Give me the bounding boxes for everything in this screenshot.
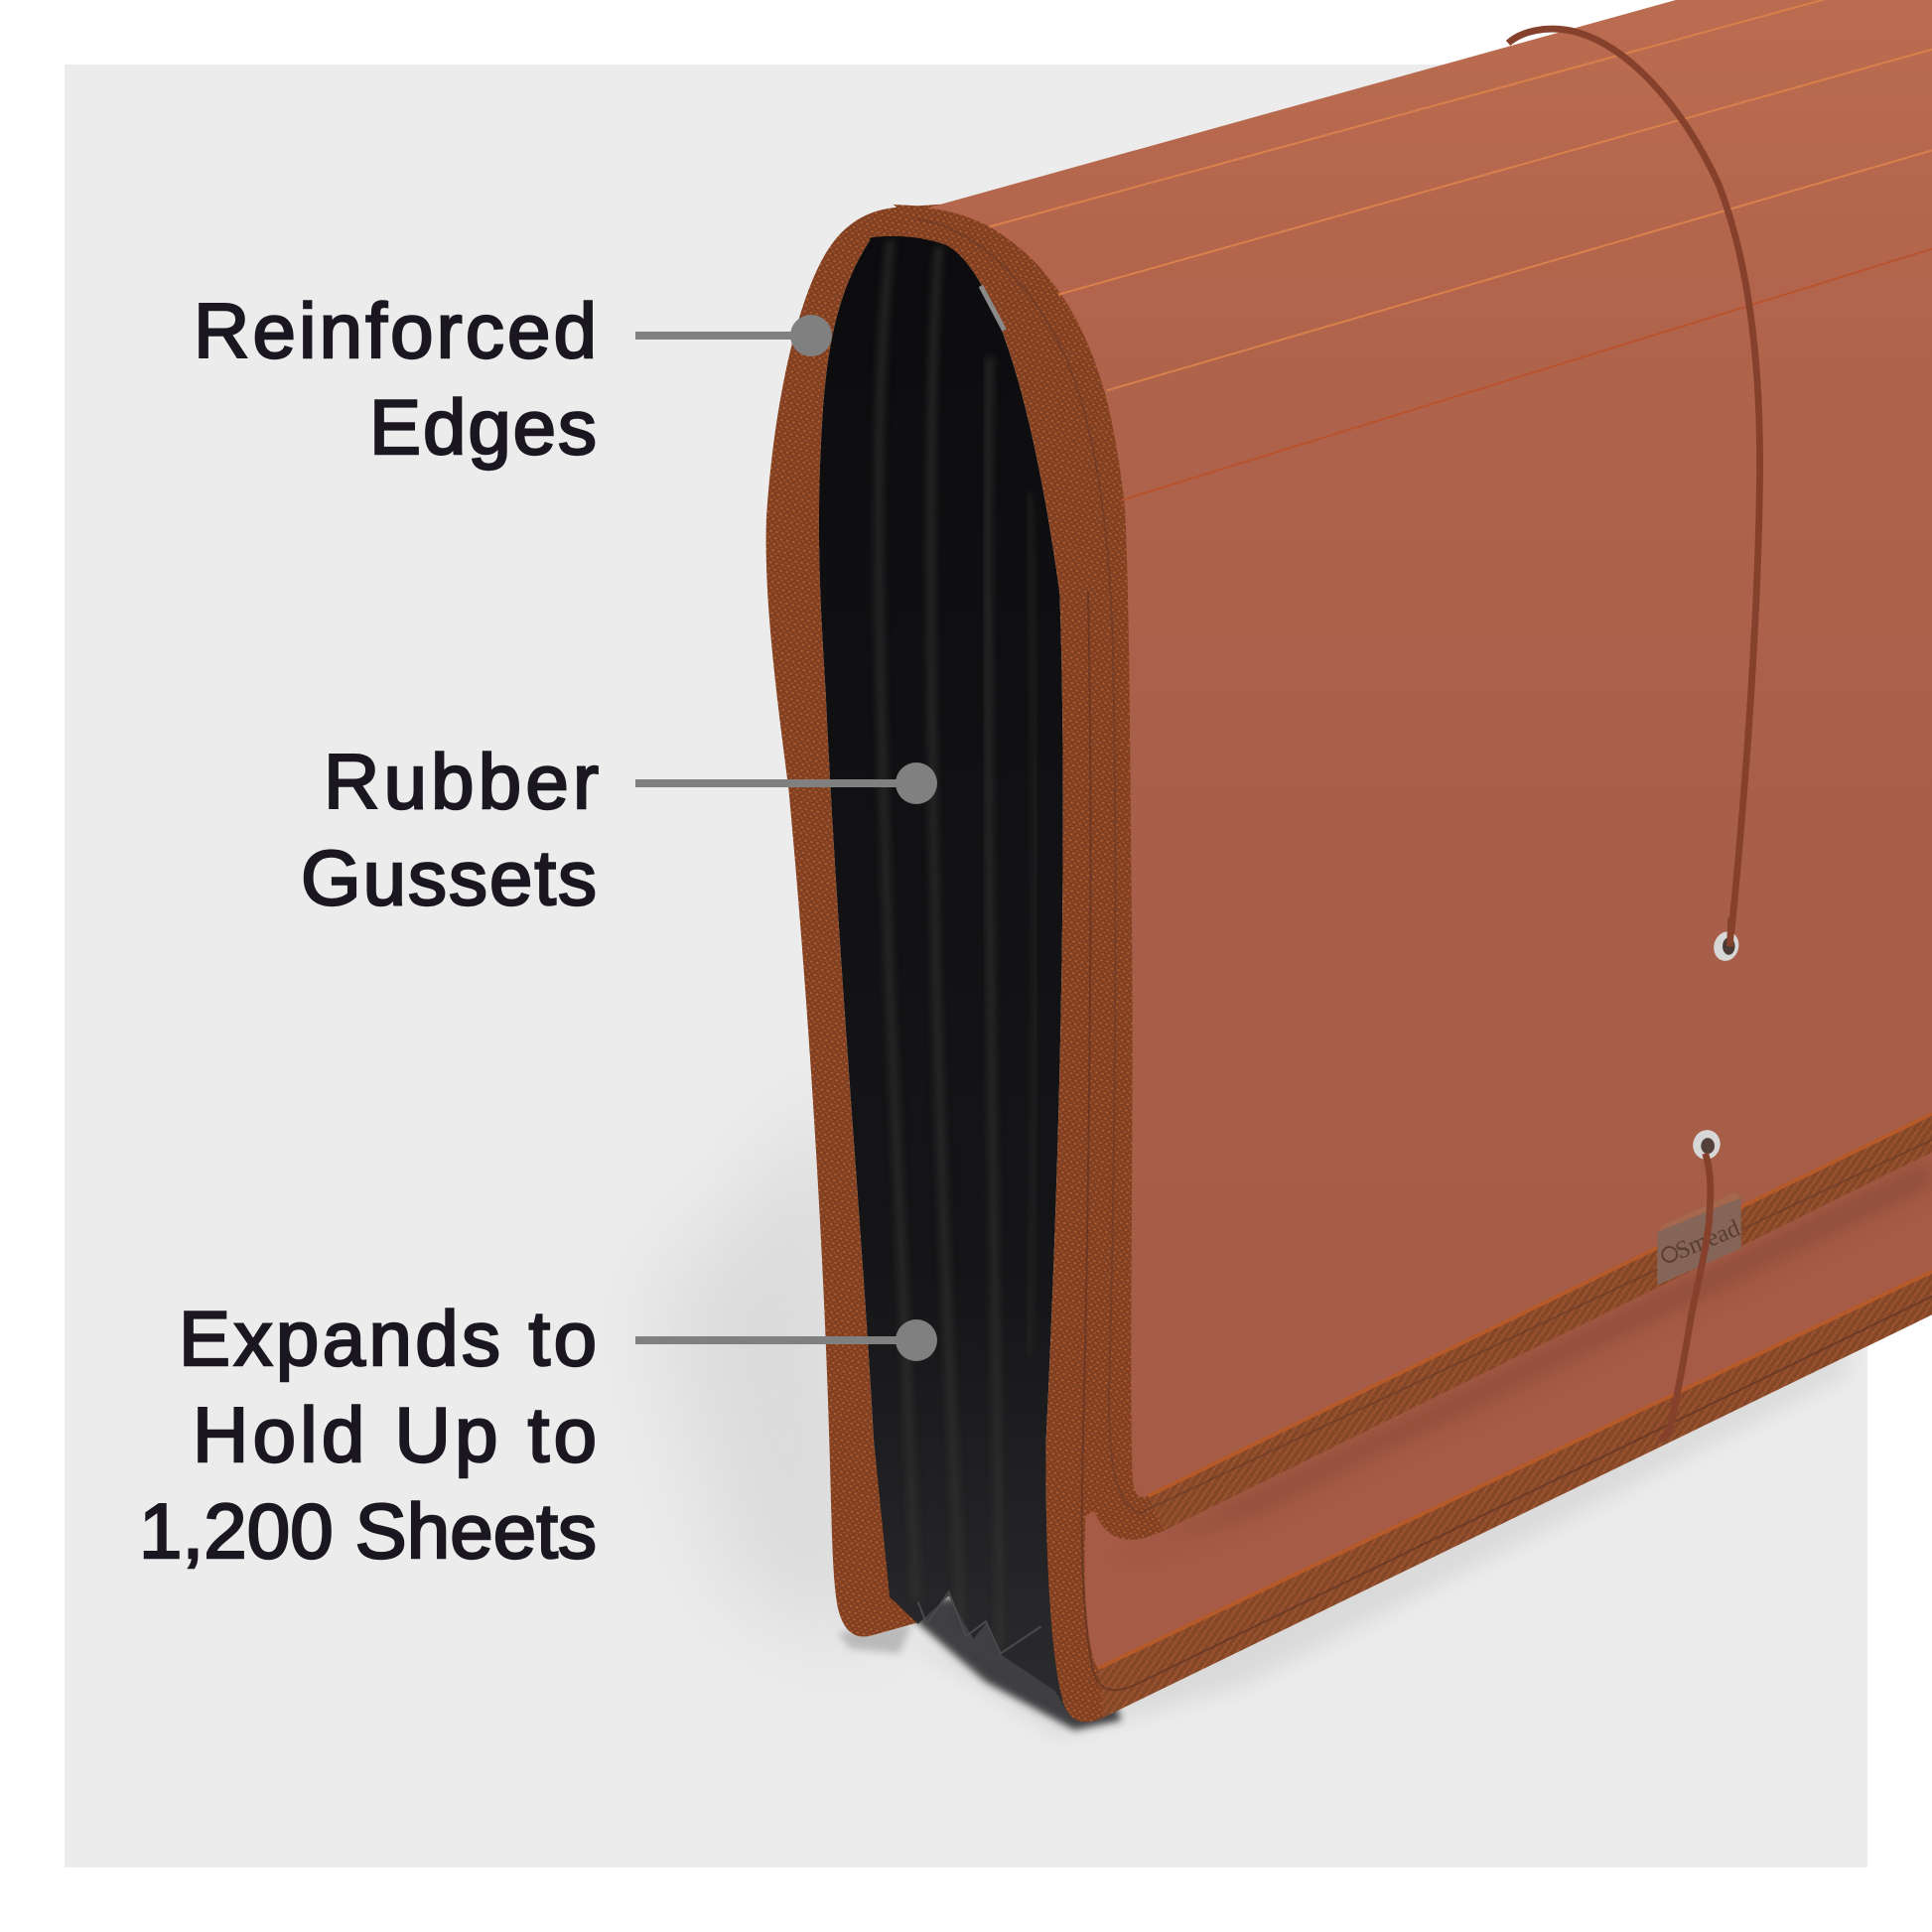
text: capacity label: Expands to	[179, 1295, 597, 1382]
callout: capacity	[139, 1295, 937, 1575]
top fold lines	[990, 0, 1932, 500]
leader line	[635, 779, 908, 787]
gusset pleats	[879, 240, 1041, 1654]
rubber gussets interior	[819, 236, 1069, 1716]
staple on inner edge	[981, 286, 1004, 331]
text: reinforced edges label: Edges	[369, 383, 597, 471]
callout: reinforced edges	[194, 287, 832, 471]
text: rubber gussets label: Rubber	[324, 738, 599, 825]
text: rubber gussets label: Gussets	[301, 834, 597, 921]
pocket shadow under flap	[1115, 1161, 1932, 1558]
text: capacity label: 1,200 Sheets	[139, 1487, 597, 1575]
elastic cord lower	[1659, 1154, 1711, 1440]
flap band highlight and stitching	[918, 219, 1932, 1690]
text: reinforced edges label: Reinforced	[194, 287, 597, 374]
text: reinforced edges label	[194, 287, 597, 471]
text: rubber gussets label	[301, 738, 599, 921]
flap binding	[900, 185, 1932, 1540]
product photo: expanding file folder	[653, 0, 1932, 1737]
text: capacity label	[139, 1295, 597, 1575]
dot marker	[896, 1319, 937, 1361]
leader line	[635, 332, 804, 340]
leader line	[635, 1336, 908, 1344]
dot marker	[790, 315, 832, 356]
metal tag	[1657, 1192, 1744, 1285]
eyelet upper	[1711, 918, 1742, 964]
front pocket binding	[946, 245, 1932, 1722]
front pocket face	[1084, 1134, 1932, 1668]
metal tag: Smead	[1672, 1214, 1744, 1265]
flap face	[926, 0, 1932, 1497]
floor shadow	[653, 1084, 1849, 1737]
callout: rubber gussets	[301, 738, 937, 921]
lower band highlight	[1098, 1272, 1932, 1668]
binding top arch	[894, 205, 1017, 296]
upper band twill	[1146, 1109, 1932, 1530]
text: capacity label: Hold Up to	[193, 1391, 597, 1478]
eyelet lower	[1690, 1127, 1724, 1163]
lower band twill	[1098, 1272, 1932, 1718]
left reinforced binding	[766, 207, 949, 1637]
dot marker	[896, 762, 937, 804]
elastic cord upper	[1508, 29, 1760, 946]
